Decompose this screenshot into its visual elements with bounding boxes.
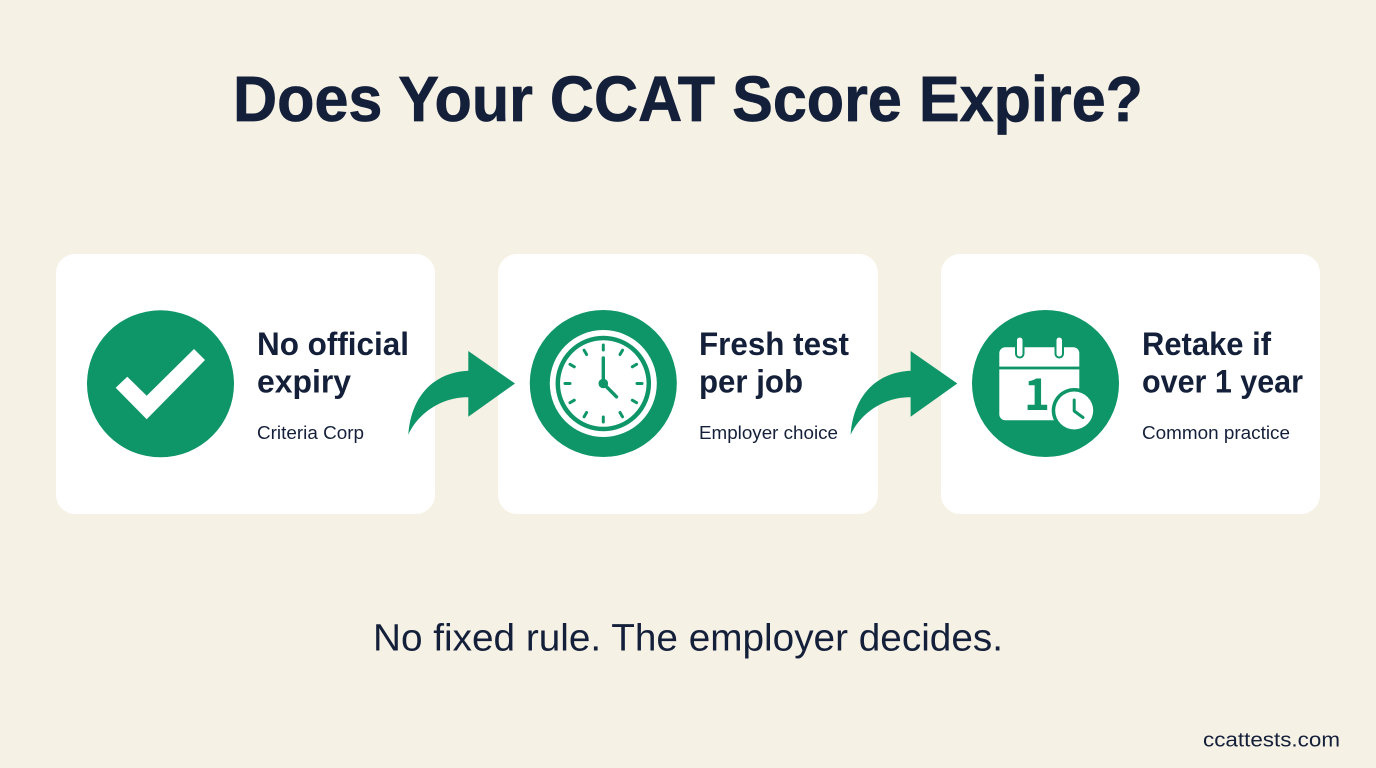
arrow: card 2 to card 3 xyxy=(851,351,957,435)
heading: retake if over 1 year xyxy=(1142,326,1303,400)
panel: fresh test per job xyxy=(498,254,878,514)
icon: clock xyxy=(530,310,677,457)
conclusion text: No fixed rule. The employer decides. xyxy=(373,618,1003,660)
heading: no official expiry xyxy=(257,326,409,400)
icon: calendar with clock: 1 xyxy=(1024,359,1050,423)
heading: retake if over 1 year: over 1 year xyxy=(1142,364,1303,400)
source: employer choice: Employer choice xyxy=(699,423,838,443)
heading: no official expiry: No official xyxy=(257,326,409,362)
heading: retake if over 1 year: Retake if xyxy=(1142,326,1271,362)
source: common practice: Common practice xyxy=(1142,423,1290,443)
heading: fresh test per job: Fresh test xyxy=(699,326,849,362)
panel: retake if over 1 year xyxy=(941,254,1320,514)
website credit: ccattests.com xyxy=(1203,730,1340,752)
heading: no official expiry: expiry xyxy=(257,364,351,400)
icon: calendar with clock xyxy=(972,310,1119,457)
icon: check mark xyxy=(87,310,234,457)
source: criteria corp: Criteria Corp xyxy=(257,423,364,443)
arrow: card 1 to card 2 xyxy=(408,351,515,435)
heading: fresh test per job xyxy=(699,326,849,400)
panel: no official expiry xyxy=(56,254,435,514)
title: Does Your CCAT Score Expire? xyxy=(233,63,1143,135)
heading: fresh test per job: per job xyxy=(699,364,803,400)
